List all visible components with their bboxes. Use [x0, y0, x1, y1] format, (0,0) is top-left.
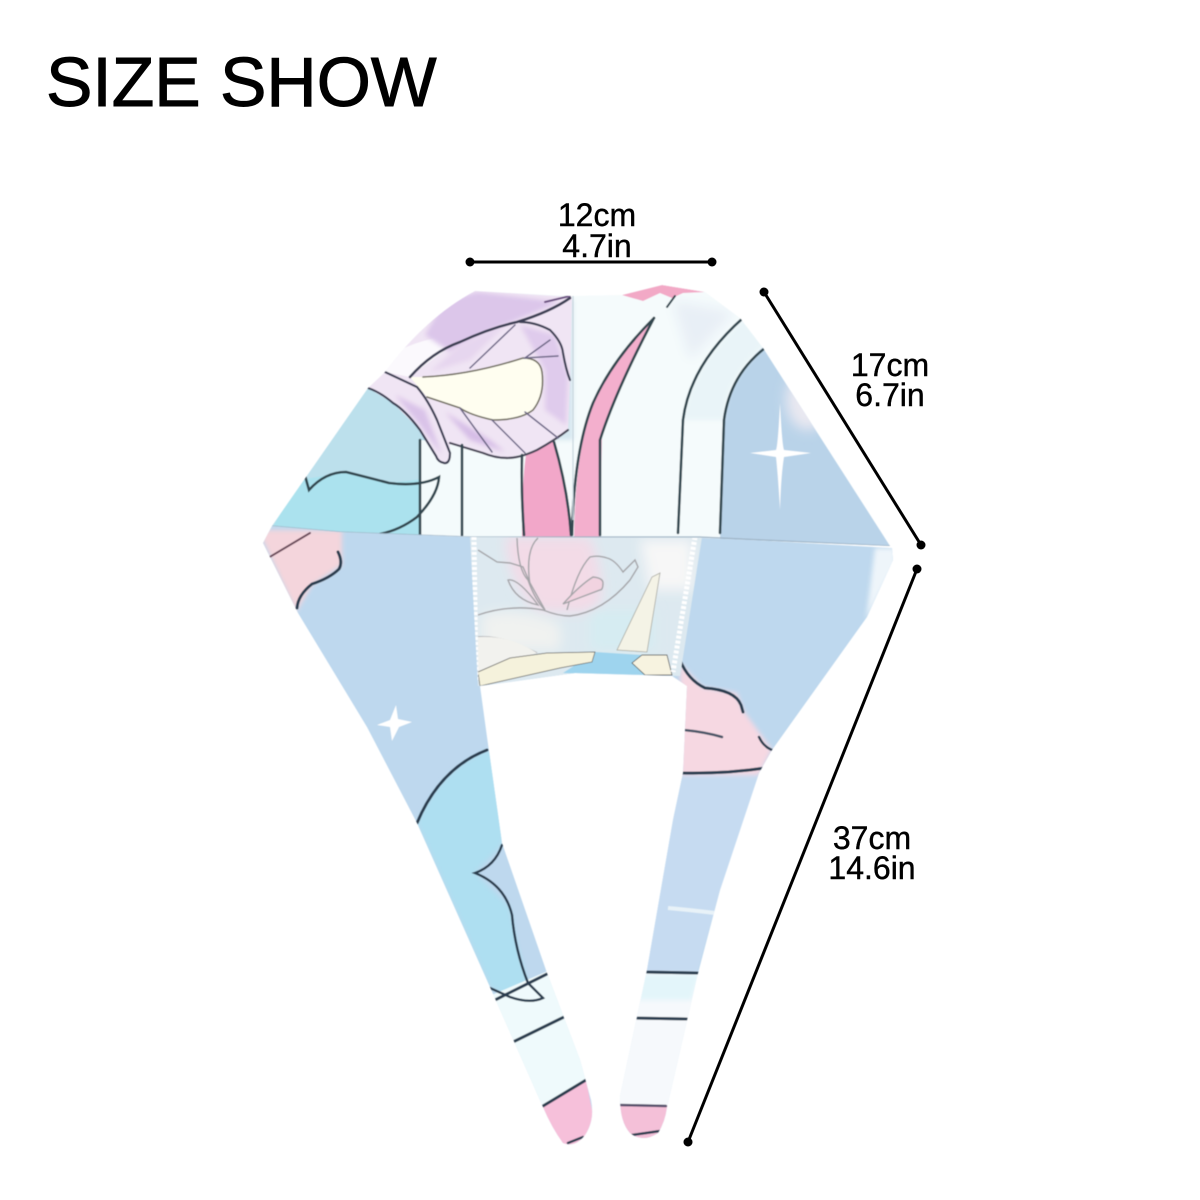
dimension: crown side 17cm: 17cm [851, 347, 929, 383]
dimension: tie length 37cm: 14.6in [828, 850, 916, 886]
dimension: crown side 17cm: 6.7in [855, 377, 925, 413]
lower left white fold [478, 637, 537, 672]
right tie upper [648, 780, 756, 970]
title: SIZE SHOW [46, 43, 437, 121]
dimension: top width 12cm: 12cm [558, 197, 636, 233]
white wedge [617, 573, 660, 652]
hem line [272, 526, 890, 546]
flower base [368, 291, 572, 463]
panel: lower lobes and ties [250, 520, 910, 1160]
right tie white stripes [615, 972, 700, 1107]
left tie pink tip [543, 1081, 592, 1145]
dark print lines on lobes [268, 533, 775, 1143]
flower [368, 291, 572, 463]
garment: surgical cap [250, 270, 910, 1160]
panel: cap crown [272, 284, 890, 546]
pink patch upper left [258, 530, 342, 612]
panel: inner elastic band [465, 536, 705, 691]
sparkle: left lobe [377, 705, 412, 741]
flower yellow petal [410, 358, 543, 420]
pink patch right [680, 663, 772, 775]
vertical print lines [304, 296, 765, 535]
dimension: top width 12cm: 4.7in [562, 228, 632, 264]
band shading [505, 537, 601, 612]
centre seam [572, 296, 574, 520]
left tie blue patch [418, 752, 526, 991]
flower purple streaks [425, 292, 560, 352]
right pale band [686, 322, 762, 418]
top pink [622, 285, 705, 301]
pink stripes [522, 440, 572, 540]
right tie pale band [641, 974, 697, 1000]
right blue area [720, 345, 900, 550]
flower outline [368, 298, 570, 463]
dimension: top width 12cm [466, 197, 716, 266]
white corner right [866, 548, 895, 620]
right tie pink tip [620, 1106, 668, 1138]
dimension: tie length 37cm [684, 564, 922, 1146]
flower top white [386, 340, 444, 376]
left blue area [272, 388, 426, 526]
left tie white stripe [493, 972, 586, 1106]
sparkle: crown [750, 403, 811, 510]
butterfly outline [478, 538, 638, 653]
dimension: crown side 17cm [760, 288, 929, 550]
stitching [474, 537, 476, 680]
sparkle: right tie streak [668, 908, 715, 913]
cream binding left [478, 652, 595, 686]
right upper haze [679, 306, 724, 349]
left-of-seam pale blue [556, 307, 572, 442]
blue elastic gathers [563, 652, 645, 675]
cream binding right [632, 655, 672, 675]
white column [420, 440, 440, 535]
dimension: tie length 37cm: 37cm [833, 820, 911, 856]
cloud patch [781, 384, 816, 434]
